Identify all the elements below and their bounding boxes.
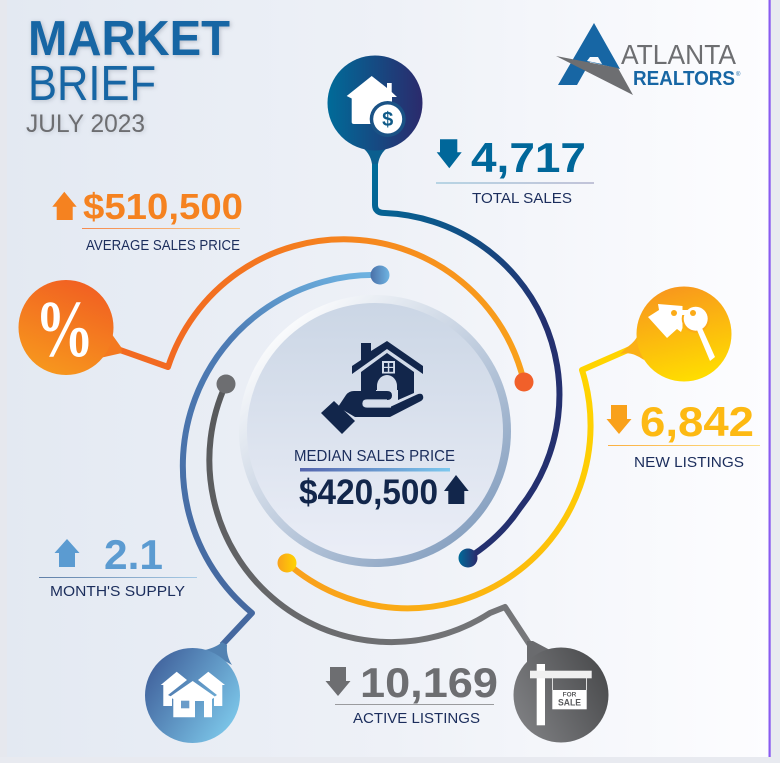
icon: for sale sign: FOR bbox=[563, 692, 577, 698]
icon: percent: % bbox=[35, 286, 94, 374]
ring: yellow new listings bbox=[287, 349, 630, 608]
stat: months supply: MONTH'S SUPPLY bbox=[50, 583, 185, 600]
arrow: up blue bbox=[54, 539, 80, 567]
arrow: down yellow bbox=[606, 405, 632, 434]
arrow: down navy bbox=[437, 139, 462, 168]
pin: total sales bbox=[328, 56, 422, 164]
icon: for sale sign bbox=[530, 664, 592, 725]
logo: Atlanta Realtors: REALTORS bbox=[633, 68, 735, 90]
ring: navy total sales bbox=[375, 150, 559, 558]
arrow: down grey bbox=[326, 667, 350, 696]
center panel: median sales price bbox=[239, 295, 511, 567]
pin: new listings bbox=[620, 286, 732, 382]
pin: active listings bbox=[514, 641, 608, 742]
stat: average sales price: AVERAGE SALES PRICE bbox=[86, 237, 240, 254]
center label: MEDIAN SALES PRICE bbox=[294, 448, 455, 465]
dot: orange bbox=[514, 372, 534, 392]
title: MARKET bbox=[28, 12, 230, 66]
stat: months supply: 2.1 bbox=[104, 531, 163, 578]
icon: house with dollar: $ bbox=[382, 109, 393, 131]
title: BRIEF bbox=[28, 57, 156, 111]
ring: orange average price bbox=[120, 239, 524, 382]
pin: months supply bbox=[145, 642, 240, 743]
stat: average sales price: $510,500 bbox=[83, 186, 243, 227]
stat: average sales price bbox=[52, 186, 243, 254]
icon: for sale sign: SALE bbox=[558, 698, 581, 708]
dot: yellow bbox=[278, 554, 296, 572]
title bbox=[26, 12, 230, 138]
arrow: up orange bbox=[52, 192, 77, 220]
center disc bbox=[247, 303, 503, 559]
stat: total sales bbox=[436, 134, 594, 207]
dot: blue bbox=[370, 266, 390, 284]
ring: grey active listings bbox=[209, 384, 530, 645]
arrow: up bbox=[444, 475, 469, 504]
logo: Atlanta Realtors: ATLANTA bbox=[621, 39, 736, 70]
dot: grey bbox=[216, 374, 236, 394]
stat: total sales: TOTAL SALES bbox=[472, 190, 572, 207]
stat: active listings: ACTIVE LISTINGS bbox=[353, 710, 480, 727]
stat: new listings: 6,842 bbox=[640, 398, 754, 445]
stat: active listings bbox=[326, 659, 498, 727]
icon: three houses bbox=[161, 672, 225, 717]
stat: new listings: NEW LISTINGS bbox=[634, 454, 744, 471]
title: JULY 2023 bbox=[26, 110, 145, 138]
stat: active listings: 10,169 bbox=[360, 659, 498, 706]
stat: new listings bbox=[606, 398, 760, 471]
center ring bbox=[239, 295, 511, 567]
center value: $420,500 bbox=[299, 473, 438, 512]
icon: house key bbox=[648, 304, 715, 361]
icon: hand holding house bbox=[321, 341, 423, 434]
logo: Atlanta Realtors bbox=[556, 23, 741, 95]
pin: average sales price bbox=[18, 280, 122, 375]
logo: Atlanta Realtors: ® bbox=[736, 71, 741, 78]
ring: blue months supply bbox=[183, 275, 380, 645]
dot: navy bbox=[458, 548, 478, 568]
stat: months supply bbox=[39, 531, 197, 600]
stat: total sales: 4,717 bbox=[471, 134, 586, 181]
